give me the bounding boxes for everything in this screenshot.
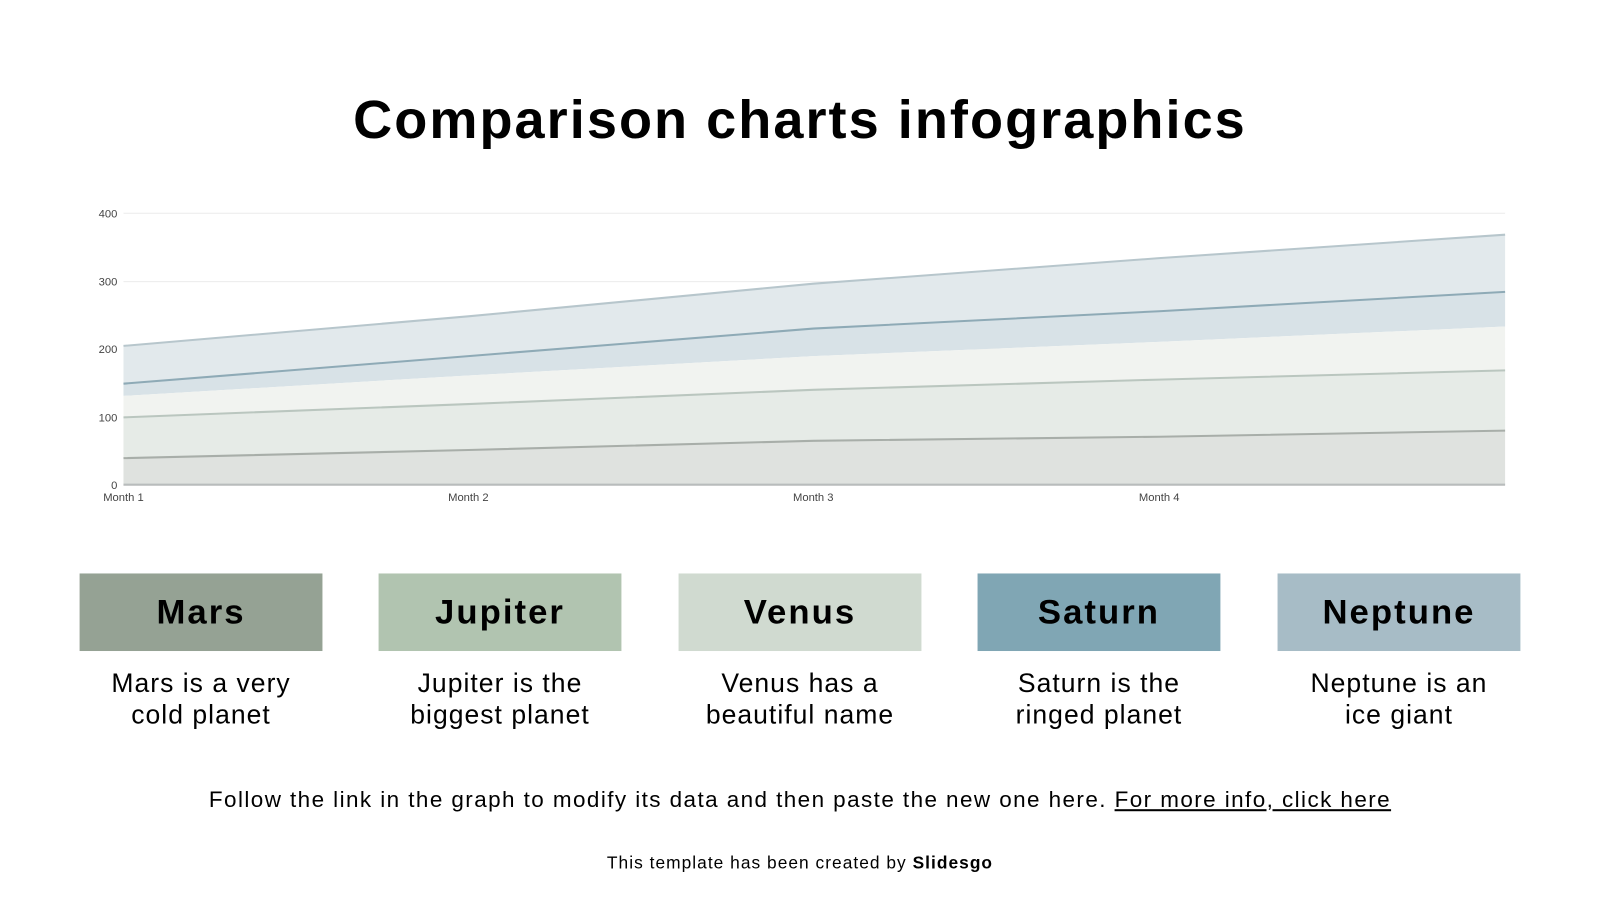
- label: Jupiter: [379, 573, 621, 651]
- label: Mars: Mars: [156, 593, 246, 632]
- label: Venus: Venus: [744, 593, 856, 632]
- label: Jupiter: Jupiter: [435, 593, 565, 632]
- title: Comparison charts infographics: [353, 90, 1247, 150]
- x axis labels: Month 2: [448, 492, 489, 504]
- y axis labels: 200: [99, 344, 117, 356]
- text: Venus: Venus has a: [721, 667, 879, 698]
- text: Mars: cold planet: [131, 699, 271, 730]
- label: Saturn: [978, 573, 1220, 651]
- area: blue band: [123, 292, 1505, 396]
- y axis labels: 100: [99, 412, 117, 424]
- text: Venus: [706, 667, 894, 730]
- label: Mars: [80, 573, 322, 651]
- x axis labels: Month 4: [1139, 492, 1179, 504]
- text: Jupiter: Jupiter is the: [418, 667, 582, 698]
- text: Neptune: Neptune is an: [1310, 667, 1487, 698]
- x axis labels: Month 1: [103, 492, 144, 504]
- y axis labels: 0: [111, 480, 117, 492]
- area: bottom band: [123, 431, 1505, 485]
- text: Saturn: ringed planet: [1016, 699, 1182, 730]
- label: Venus: [679, 573, 921, 651]
- text: Venus: beautiful name: [706, 699, 894, 730]
- label: Saturn: Saturn: [1038, 593, 1160, 632]
- text: Neptune: ice giant: [1345, 699, 1453, 730]
- text: Saturn: [1016, 667, 1182, 730]
- label: Neptune: Neptune: [1322, 593, 1476, 632]
- text: Mars: Mars is a very: [111, 667, 291, 698]
- text: Jupiter: [410, 667, 590, 730]
- area: light band: [123, 327, 1505, 417]
- text: Mars: [111, 667, 291, 730]
- footer note: Follow the link in the graph to modify its data and then paste the new one here. For more info, click here: [209, 787, 1391, 812]
- text: Neptune: [1310, 667, 1487, 730]
- y axis labels: 400: [99, 208, 117, 220]
- y axis labels: [99, 208, 117, 492]
- y axis labels: 300: [99, 277, 117, 289]
- text: Saturn: Saturn is the: [1018, 667, 1180, 698]
- area: green band: [123, 370, 1505, 458]
- area: top band: [123, 235, 1505, 384]
- label: Neptune: [1278, 573, 1520, 651]
- chart: stacked area: [98, 208, 1506, 504]
- credit: This template has been created by Slidesgo: [607, 853, 993, 872]
- x axis labels: Month 3: [793, 492, 834, 504]
- x axis labels: [103, 492, 1179, 504]
- text: Jupiter: biggest planet: [410, 699, 590, 730]
